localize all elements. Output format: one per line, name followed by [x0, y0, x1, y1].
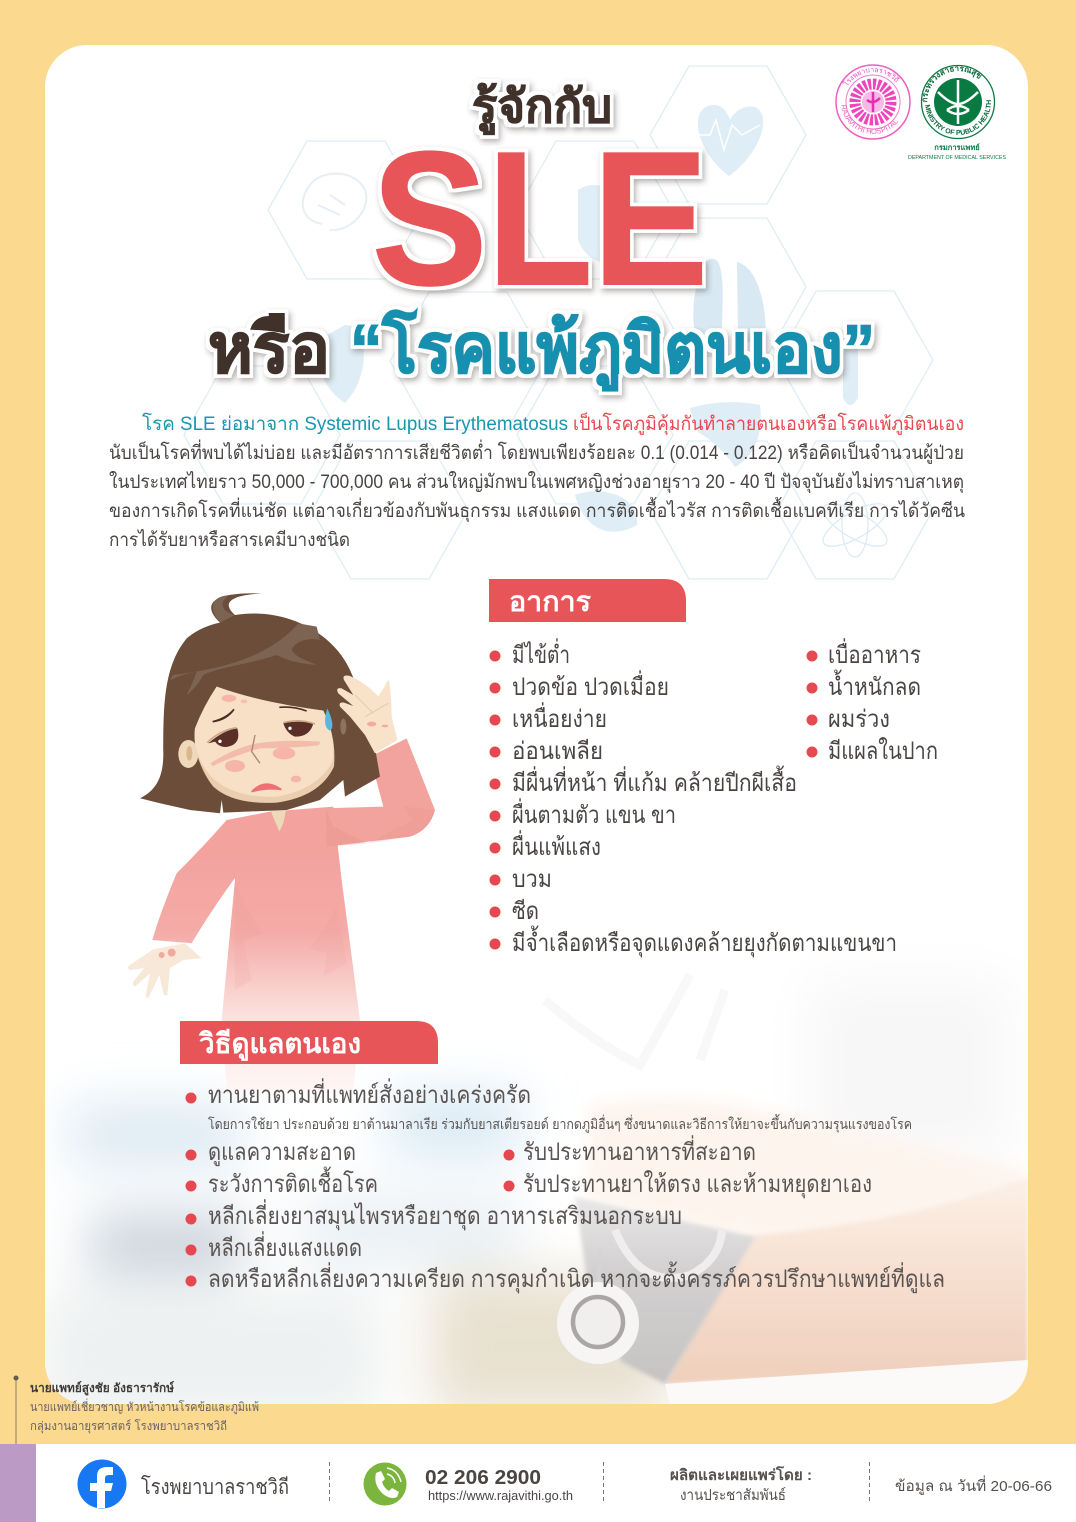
- data date: ข้อมูล ณ วันที่ 20-06-66: [895, 1475, 1052, 1495]
- self care list: หลีกเลี่ยงแสงแดด: [208, 1231, 362, 1262]
- heading: SLE: SLE: [372, 113, 708, 325]
- self care list: โดยการใช้ยา ประกอบด้วย ยาต้านมาลาเรีย ร่วมกับยาสเตียรอยด์ ยากดภูมิอื่นๆ ซึ่งขนาดและวิธีการให้ยาจะขึ้นกับความรุนแรงของโรค: [208, 1114, 912, 1133]
- phone number and website: 02 206 2900: [425, 1467, 541, 1489]
- panel: symptoms: [489, 579, 938, 958]
- icon: stethoscope chest piece: [557, 1282, 639, 1364]
- credit: physician author: กลุ่มงานอายุรศาสตร์ โรงพยาบาลราชวิถี: [30, 1419, 227, 1434]
- symptom list: left column: [490, 638, 897, 958]
- heading tab: อาการ: [489, 579, 686, 622]
- logo: Rajavithi Hospital: [835, 64, 911, 140]
- publisher: งานประชาสัมพันธ์: [680, 1487, 786, 1504]
- left hand: [128, 943, 202, 998]
- symptom list: left column: มีจ้ำเลือดหรือจุดแดงคล้ายยุงกัดตามแขนขา: [512, 925, 897, 958]
- self care list: [186, 1078, 945, 1294]
- self care list: รับประทานอาหารที่สะอาด: [523, 1135, 756, 1166]
- symptom list: right column: ผมร่วง: [828, 706, 890, 733]
- symptom list: right column: เบื่ออาหาร: [828, 638, 921, 669]
- self care list: ลดหรือหลีกเลี่ยงความเครียด การคุมกำเนิด หากจะตั้งครรภ์ควรปรึกษาแพทย์ที่ดูแล: [208, 1261, 945, 1294]
- logo caption: [908, 143, 1006, 159]
- phone number and website: https://www.rajavithi.go.th: [428, 1488, 573, 1503]
- heading: หรือ: หรือ: [208, 311, 330, 387]
- logo: Rajavithi Hospital: RAJAVITHI HOSPITAL: [841, 104, 898, 134]
- logo: Rajavithi Hospital: โรงพยาบาลราชวิถี: [842, 68, 900, 85]
- jaw shadow and face: [195, 687, 334, 803]
- text block: introduction: นับเป็นโรคที่พบได้ไม่บ่อย และมีอัตราการเสียชีวิตต่ำ โดยพบเพียงร้อยละ 0.1 (0.014 - 0.122) หรือคิดเป็นจำนวนผู้ป่วย: [109, 439, 964, 464]
- symptom list: left column: ซีด: [512, 898, 539, 925]
- text block: introduction: เป็นโรคภูมิคุ้มกันทำลายตนเองหรือโรคแพ้ภูมิตนเอง: [573, 411, 964, 436]
- self care list: ดูแลความสะอาด: [208, 1139, 356, 1167]
- symptom list: left column: มีผื่นที่หน้า ที่แก้ม คล้ายปีกผีเสื้อ: [512, 765, 797, 797]
- symptom list: left column: มีไข้ต่ำ: [512, 638, 570, 669]
- heading tab: วิธีดูแลตนเอง: วิธีดูแลตนเอง: [198, 1028, 361, 1061]
- heading tab: อาการ: อาการ: [509, 586, 591, 617]
- logo: Ministry of Public Health: กระทรวงสาธารณสุข: [922, 66, 982, 102]
- logo: Ministry of Public Health: [920, 64, 996, 140]
- logo caption: DEPARTMENT OF MEDICAL SERVICES: [908, 155, 1006, 161]
- symptom list: left column: เหนื่อยง่าย: [512, 702, 607, 733]
- text block: introduction: การได้รับยาหรือสารเคมีบางชนิด: [109, 529, 350, 551]
- sweat drop: [325, 708, 332, 731]
- credit: physician author: [14, 1376, 259, 1444]
- eyes: [208, 728, 238, 747]
- right hand: [337, 675, 397, 753]
- self care list: หลีกเลี่ยงยาสมุนไพรหรือยาชุด อาหารเสริมนอกระบบ: [208, 1199, 682, 1231]
- logo: Ministry of Public Health: MINISTRY OF PUBLIC HEALTH: [925, 100, 992, 135]
- logos: hospital and ministry seals: [835, 64, 1006, 159]
- heading: โรคแพ้ภูมิตนเอง: “โรคแพ้ภูมิตนเอง”: [350, 309, 875, 392]
- dress: [222, 807, 360, 1090]
- self care list: รับประทานยาให้ตรง และห้ามหยุดยาเอง: [523, 1170, 872, 1199]
- background: honeycomb of medical icons: [184, 66, 933, 579]
- facebook page name: โรงพยาบาลราชวิถี: [141, 1475, 289, 1499]
- self care list: ระวังการติดเชื้อโรค: [208, 1166, 378, 1198]
- icon: facebook: [78, 1460, 126, 1508]
- illustration: sick girl touching her forehead: [128, 593, 435, 1090]
- symptom list: right column: [806, 638, 938, 765]
- hair highlight: [170, 623, 320, 695]
- ear: [178, 740, 198, 768]
- text block: introduction: ในประเทศไทยราว 50,000 - 700,000 คน ส่วนใหญ่มักพบในเพศหญิงช่วงอายุราว 20 - 40 ปี ปัจจุบันยังไม่ทราบสาเหตุ: [109, 471, 964, 494]
- logo caption: กรมการแพทย์: [934, 143, 980, 152]
- publisher: [670, 1465, 812, 1504]
- symptom list: right column: มีแผลในปาก: [828, 737, 938, 765]
- symptom list: left column: ปวดข้อ ปวดเมื่อย: [512, 670, 669, 701]
- ear shadow behind hand: [340, 719, 346, 735]
- publisher: ผลิตและเผยแพร่โดย :: [670, 1465, 812, 1484]
- phone number and website: [425, 1467, 573, 1503]
- neck: [270, 810, 286, 832]
- icon: phone: [364, 1462, 406, 1506]
- background photo: doctor with stethoscope: [45, 1074, 1028, 1404]
- text block: introduction: โรค SLE ย่อมาจาก Systemic Lupus Erythematosus: [142, 412, 568, 435]
- symptom list: left column: ผื่นตามตัว แขน ขา: [512, 798, 676, 829]
- hair: [140, 593, 380, 813]
- footer: [0, 1444, 1076, 1522]
- panel: self care: [180, 1021, 945, 1294]
- symptom list: left column: อ่อนเพลีย: [512, 738, 603, 765]
- symptom list: left column: ผื่นแพ้แสง: [512, 830, 601, 861]
- symptom list: left column: บวม: [512, 866, 552, 893]
- self care list: ทานยาตามที่แพทย์สั่งอย่างเคร่งครัด: [208, 1078, 531, 1109]
- heading: รู้จักกับ: รู้จักกับ: [472, 80, 612, 135]
- text block: introduction: ของการเกิดโรคที่แน่ชัด แต่อาจเกี่ยวข้องกับพันธุกรรม แสงแดด การติดเชื้อไวรัส การติดเชื้อแบคทีเรีย การได้วัคซีน: [109, 497, 965, 523]
- text block: introduction: [109, 411, 965, 551]
- nose and mouth: [252, 735, 260, 763]
- facial rash: [211, 741, 320, 766]
- credit: physician author: นายแพทย์สูงชัย อังธารารักษ์: [30, 1381, 174, 1396]
- credit: physician author: นายแพทย์เชี่ยวชาญ หัวหน้างานโรคข้อและภูมิแพ้: [30, 1398, 259, 1415]
- symptom list: right column: น้ำหนักลด: [828, 669, 921, 701]
- heading tab: วิธีดูแลตนเอง: [180, 1021, 438, 1064]
